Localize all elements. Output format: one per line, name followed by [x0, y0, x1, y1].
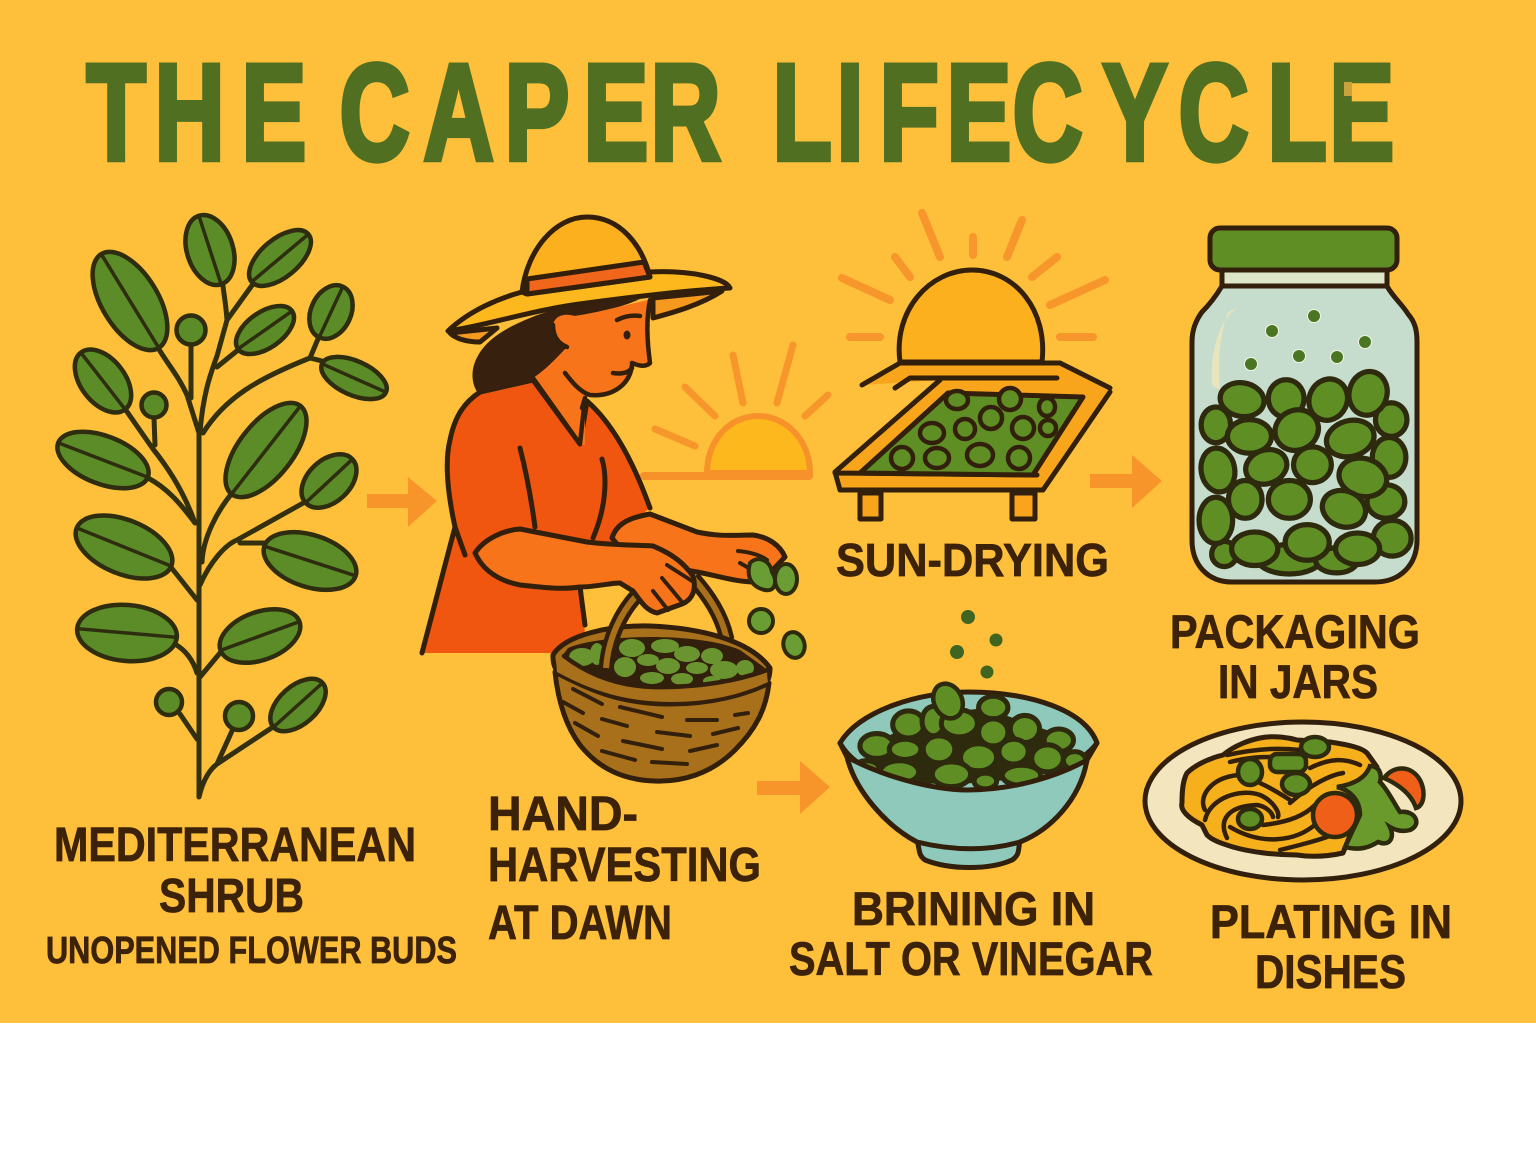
farmer dress — [422, 380, 650, 653]
falling caper dots — [950, 610, 1002, 678]
label: brining: BRINING IN — [852, 882, 1095, 935]
bowl capers — [854, 679, 1086, 789]
basket rim — [553, 626, 770, 706]
basket body — [555, 672, 769, 781]
jar body — [1192, 286, 1417, 582]
pasta capers — [1238, 737, 1329, 829]
floating capers — [1244, 310, 1372, 370]
plate — [1145, 722, 1461, 880]
falling capers — [749, 559, 808, 660]
icon: brine bowl — [840, 610, 1097, 868]
farmer near arm — [475, 529, 694, 613]
arrow: drying to packaging — [1090, 455, 1162, 508]
icon: farmer harvesting — [422, 217, 785, 653]
label: Mediterranean shrub: UNOPENED FLOWER BUDS — [46, 930, 457, 972]
tomatoes — [1313, 793, 1357, 837]
label: brining: SALT OR VINEGAR — [789, 932, 1153, 985]
label: hand-harvesting: AT DAWN — [488, 897, 672, 950]
jarred capers — [1198, 367, 1411, 574]
label: hand-harvesting: HARVESTING — [488, 839, 761, 892]
label: Mediterranean shrub: MEDITERRANEAN — [54, 819, 416, 872]
farmer back arm — [612, 514, 785, 582]
tray frame — [835, 363, 1110, 490]
label: packaging in jars: IN JARS — [1218, 655, 1378, 708]
icon: plated pasta — [1145, 722, 1461, 880]
farmer hair — [473, 299, 640, 393]
garnish — [1337, 766, 1416, 849]
label: plating in dishes: DISHES — [1255, 945, 1406, 998]
title: LIFECYCLE — [772, 36, 1394, 189]
title — [86, 36, 1394, 189]
capers in basket — [563, 637, 765, 687]
label: packaging in jars — [1170, 605, 1420, 708]
arrow: harvest to brining — [757, 761, 830, 814]
farmer hat — [448, 217, 730, 342]
bowl foot — [917, 840, 1020, 868]
basket handle back — [693, 578, 727, 640]
bowl front — [847, 757, 1087, 849]
title: THE — [86, 36, 306, 189]
tray screen — [860, 393, 1083, 475]
farmer face — [533, 300, 650, 445]
title: CAPER — [340, 36, 721, 189]
icon: drying tray — [835, 363, 1110, 519]
drying capers — [891, 388, 1056, 469]
icon: woven basket — [553, 578, 770, 781]
label: sun-drying: SUN-DRYING — [836, 534, 1109, 586]
bowl back — [840, 692, 1097, 790]
label: hand-harvesting: HAND- — [488, 788, 638, 841]
label: Mediterranean shrub — [46, 819, 457, 972]
label: Mediterranean shrub: SHRUB — [159, 870, 304, 923]
jar lid — [1210, 228, 1397, 270]
icon: caper shrub — [50, 209, 393, 797]
pasta — [1182, 737, 1377, 856]
glass highlight — [1212, 304, 1245, 390]
icon: sun-drying sun — [842, 213, 1105, 362]
label: brining — [789, 882, 1153, 985]
arrow: shrub to harvest — [367, 477, 437, 527]
tray legs — [860, 493, 881, 519]
label: packaging in jars: PACKAGING — [1170, 605, 1420, 658]
label: hand-harvesting — [488, 788, 761, 950]
label: plating in dishes — [1210, 895, 1452, 998]
basket handle front — [606, 592, 640, 670]
jar neck — [1222, 268, 1387, 288]
label: plating in dishes: PLATING IN — [1210, 895, 1452, 948]
icon: rising sun behind farmer — [640, 345, 828, 480]
icon: jar of capers — [1192, 228, 1417, 582]
